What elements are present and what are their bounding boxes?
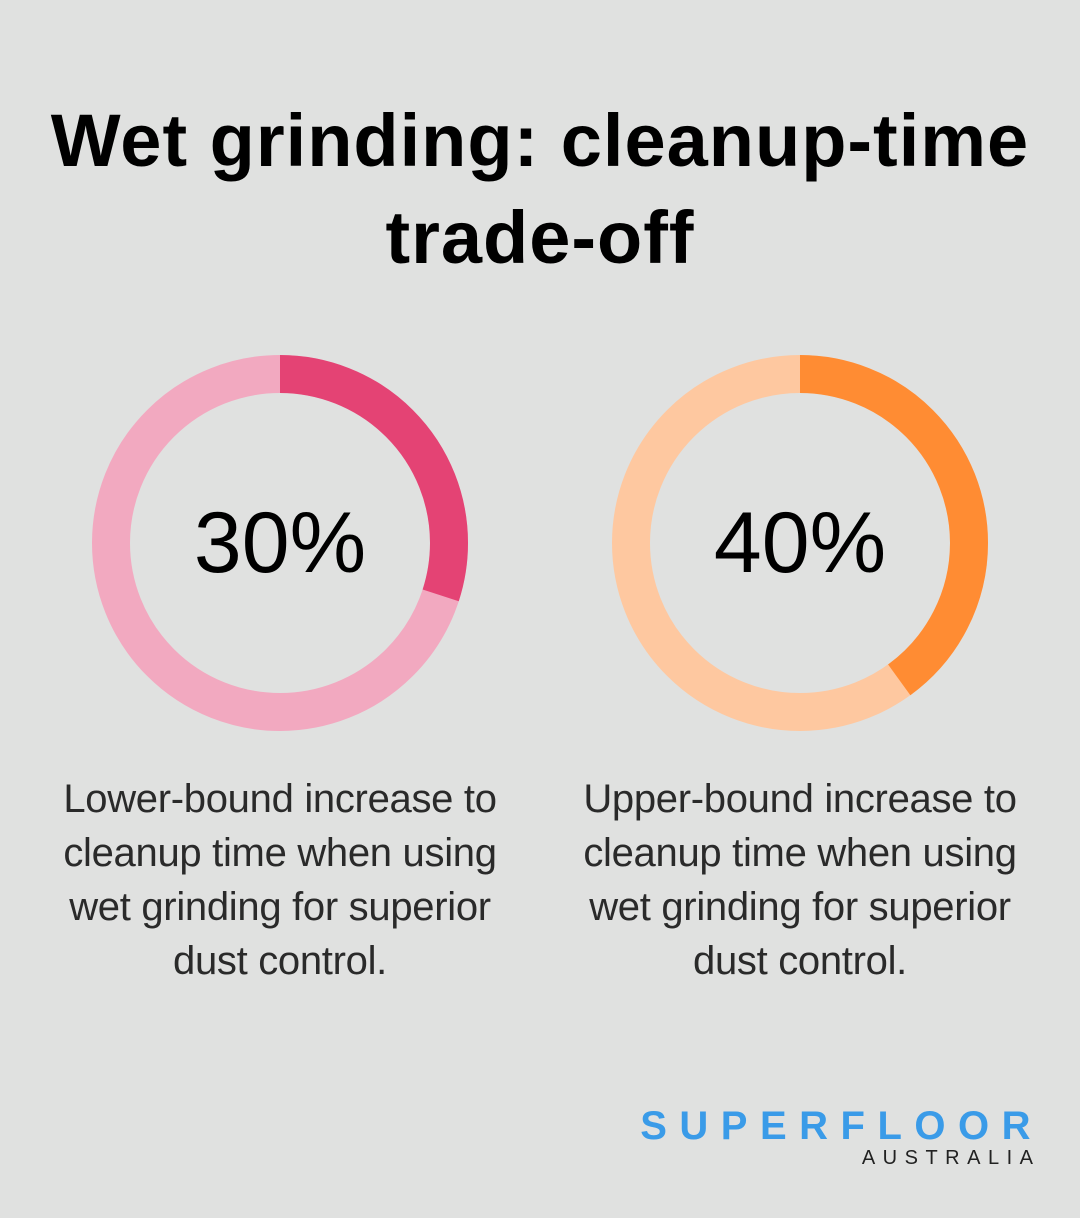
donut: 30%: 30% (194, 495, 366, 591)
logo: SUPERFLOOR (640, 1104, 1043, 1148)
title: Wet grinding: cleanup-time (51, 99, 1029, 182)
text: upper-bound description: Upper-bound increase to cleanup time when using wet grinding for superior dust control. (583, 777, 1017, 983)
title (50, 99, 1029, 279)
title: trade-off (385, 196, 695, 279)
logo (640, 1104, 1043, 1169)
text: lower-bound description: Lower-bound increase to cleanup time when using wet grinding for superior dust control. (63, 777, 497, 983)
logo: AUSTRALIA (862, 1147, 1040, 1169)
donut: 30% (111, 374, 449, 712)
donut: 40%: 40% (714, 495, 886, 591)
donut: 40% (631, 374, 969, 712)
